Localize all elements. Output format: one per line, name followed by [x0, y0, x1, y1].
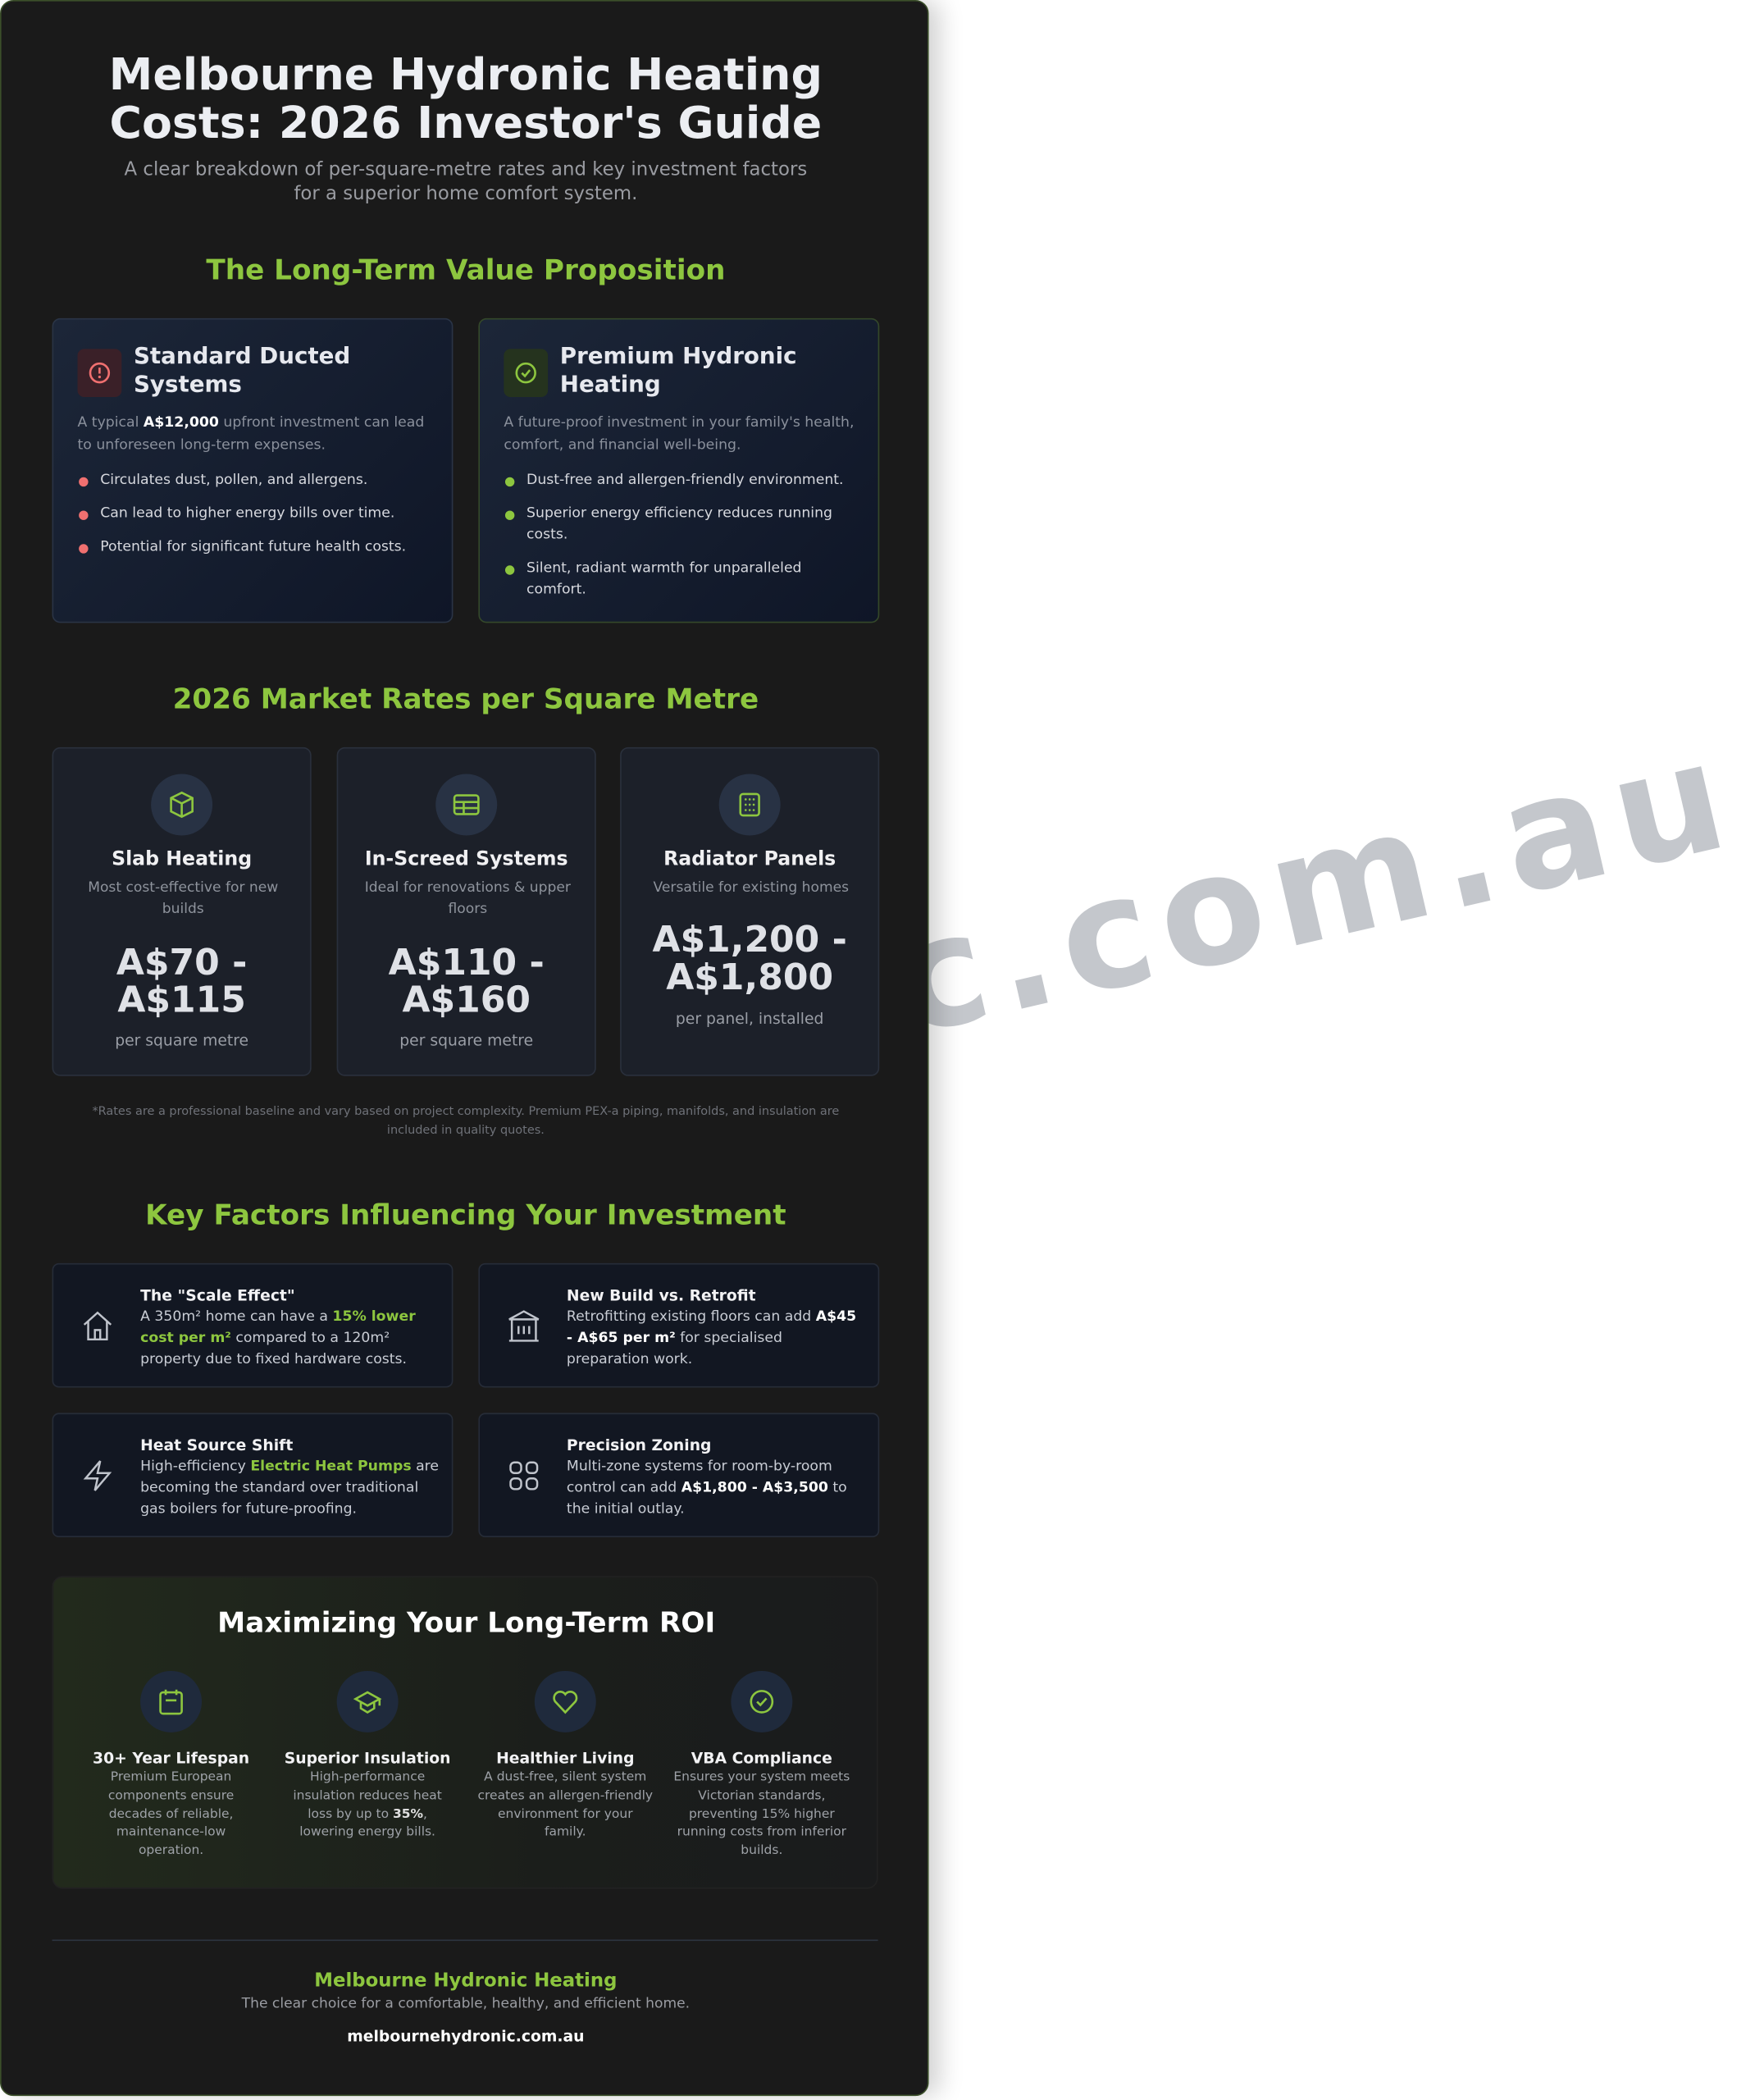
bullet list: Can lead to higher energy bills over time.	[100, 505, 394, 522]
card: premium hydronic	[478, 318, 879, 623]
price	[116, 943, 247, 1021]
ROI item: VBA compliance: VBA Compliance	[691, 1748, 832, 1767]
footer: melbournehydronic.com.au	[347, 2026, 585, 2045]
factor: zoning: Precision Zoning	[567, 1436, 711, 1454]
factor: new build vs retrofit: Retrofitting existing floors can add A$45 - A$65 per m² for specialised preparation work.	[567, 1308, 856, 1368]
ROI item: VBA compliance	[673, 1671, 850, 1858]
bullet list: Superior energy efficiency reduces running costs.	[526, 505, 832, 543]
main panel	[0, 0, 929, 2096]
icon: building	[508, 1310, 540, 1342]
footer	[241, 1970, 690, 2045]
ROI item: healthier living: Healthier Living	[496, 1748, 635, 1767]
icon: cube	[151, 774, 212, 835]
factor: new build vs retrofit	[478, 1263, 879, 1387]
bullet list: Silent, radiant warmth for unparalleled comfort.	[526, 560, 802, 597]
price: A$1,800	[666, 957, 833, 998]
panel: ROI	[52, 1576, 878, 1889]
factor: scale effect	[52, 1263, 453, 1387]
bullet list: Circulates dust, pollen, and allergens.	[100, 472, 367, 488]
card title: Standard Ducted	[134, 344, 350, 370]
title: Melbourne Hydronic Heating	[109, 48, 823, 100]
card title: Premium Hydronic	[560, 344, 797, 370]
icon: alert	[78, 349, 121, 397]
bullet list	[79, 472, 406, 555]
ROI heading: Maximizing Your Long-Term ROI	[217, 1607, 715, 1639]
bullet list: Dust-free and allergen-friendly environment.	[526, 472, 844, 488]
ROI item: insulation: High-performance insulation reduces heat loss by up to 35%, lowering energy bills.	[293, 1770, 442, 1840]
ROI item: VBA compliance: Ensures your system meets Victorian standards, preventing 15% higher running costs from inferior builds.	[673, 1770, 850, 1858]
rate card: radiator: per panel, installed	[676, 1009, 823, 1028]
icon: check	[504, 349, 548, 397]
card title: Heating	[560, 372, 661, 399]
price: A$1,200 -	[652, 920, 847, 961]
icon: grid	[509, 1462, 538, 1490]
factor: scale effect: The "Scale Effect"	[140, 1286, 295, 1304]
icon: house	[84, 1311, 112, 1340]
price	[389, 943, 545, 1021]
factor: heat source	[52, 1413, 453, 1537]
footer: The clear choice for a comfortable, healthy, and efficient home.	[242, 1996, 690, 2011]
price: A$110 -	[389, 943, 545, 984]
ROI item: insulation: Superior Insulation	[285, 1748, 450, 1767]
rate card: radiator: Radiator Panels	[663, 849, 836, 870]
factor: zoning	[478, 1413, 879, 1537]
card title: Systems	[134, 372, 242, 399]
rate card: slab: Most cost-effective for new builds	[88, 879, 278, 917]
price: A$115	[117, 979, 246, 1021]
title: Costs: 2026 Investor's Guide	[110, 96, 822, 148]
card: standard ducted	[52, 318, 453, 623]
footer: Melbourne Hydronic Heating	[314, 1970, 617, 1992]
ROI item: lifespan: Premium European components ensure decades of reliable, maintenance-low operation.	[108, 1770, 234, 1858]
description: A typical A$12,000 upfront investment can lead to unforeseen long-term expenses.	[78, 414, 424, 453]
footnote: *Rates are a professional baseline and vary based on project complexity. Premium PEX-a piping, manifolds, and insulation are included in quality quotes.	[92, 1106, 839, 1138]
heading: market rates: 2026 Market Rates per Square Metre	[173, 683, 759, 715]
rate card: radiator: Versatile for existing homes	[654, 879, 849, 896]
card title	[560, 344, 797, 399]
icon: panel	[719, 774, 781, 835]
heading: key factors: Key Factors Influencing Your Investment	[145, 1199, 786, 1231]
factor: heat source: Heat Source Shift	[140, 1436, 293, 1454]
subtitle: A clear breakdown of per-square-metre rates and key investment factors for a superior home comfort system.	[125, 159, 807, 204]
bullet list: Potential for significant future health costs.	[100, 539, 406, 555]
price: A$70 -	[116, 943, 247, 984]
icon: bolt	[84, 1460, 112, 1491]
ROI item: healthier living: A dust-free, silent system creates an allergen-friendly environment for your family.	[478, 1770, 653, 1840]
title	[109, 48, 823, 148]
rate card: in-screed: Ideal for renovations & upper floors	[365, 879, 571, 917]
rate card: in-screed: per square metre	[399, 1030, 533, 1049]
rate card: slab	[52, 747, 312, 1076]
rate card: slab: Slab Heating	[112, 849, 252, 870]
rate card: slab: per square metre	[115, 1030, 248, 1049]
factor: new build vs retrofit: New Build vs. Retrofit	[567, 1286, 756, 1304]
price: A$160	[402, 979, 531, 1021]
price	[652, 920, 847, 998]
rate card: in-screed: In-Screed Systems	[365, 849, 568, 870]
factor: heat source: High-efficiency Electric Heat Pumps are becoming the standard over traditional gas boilers for future-proofing.	[140, 1459, 439, 1518]
description: A future-proof investment in your family's health, comfort, and financial well-being.	[504, 414, 854, 453]
ROI item: lifespan	[93, 1671, 249, 1858]
icon: table	[435, 774, 497, 835]
rate card: radiator	[620, 747, 879, 1076]
factor: zoning: Multi-zone systems for room-by-room control can add A$1,800 - A$3,500 to the initial outlay.	[567, 1459, 847, 1518]
heading: value proposition: The Long-Term Value Proposition	[206, 254, 725, 286]
factor: scale effect: A 350m² home can have a 15% lower cost per m² compared to a 120m² property due to fixed hardware costs.	[140, 1308, 416, 1368]
ROI item: healthier living	[478, 1671, 653, 1840]
card title	[134, 344, 350, 399]
ROI item: insulation	[285, 1671, 450, 1840]
bullet list	[505, 472, 844, 597]
ROI item: lifespan: 30+ Year Lifespan	[93, 1748, 249, 1767]
rate card: in-screed	[337, 747, 596, 1076]
